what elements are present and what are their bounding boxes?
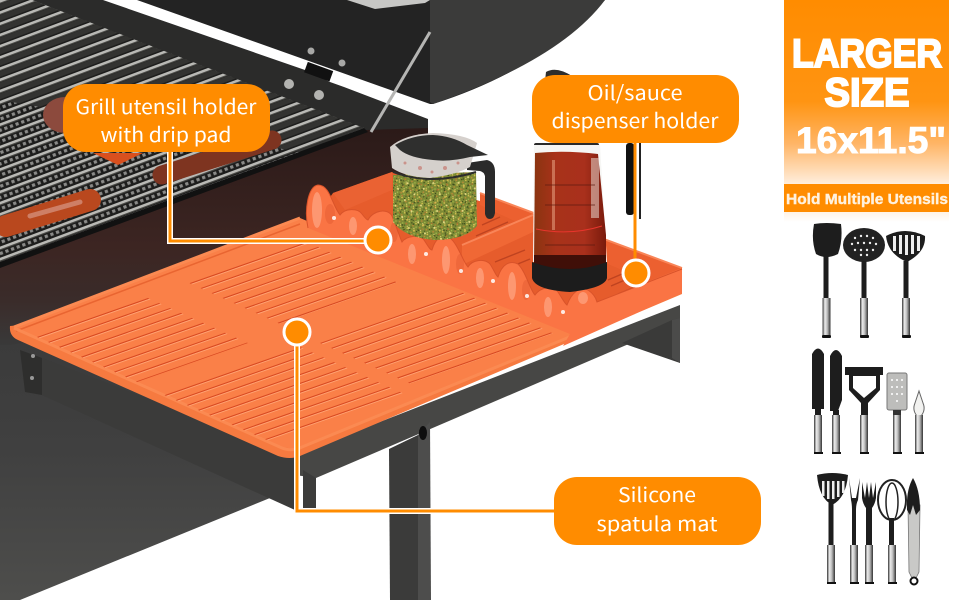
- panel: larger size: [784, 0, 949, 184]
- compartment floor ribs: [476, 217, 652, 300]
- banner: hold multiple utensils: Hold Multiple Utensils: [786, 191, 948, 208]
- callout label: silicone spatula mat: spatula mat: [596, 508, 718, 537]
- banner: hold multiple utensils: [784, 184, 949, 222]
- rod: [371, 32, 430, 132]
- lid: [137, 0, 605, 104]
- icon: slotted spoon: [843, 228, 885, 338]
- icon: potato masher: [845, 367, 883, 454]
- icon: narrow spatula: [830, 350, 842, 454]
- scalloped utensil ridge: [306, 185, 682, 346]
- heading: larger size: LARGER: [792, 32, 942, 76]
- callout label: oil sauce dispenser holder: [532, 75, 739, 143]
- callout label: oil sauce dispenser holder: dispenser holder: [552, 105, 719, 134]
- shelf side and legs: [20, 305, 680, 600]
- utensils row 1: [813, 223, 925, 338]
- utensils row 3: [817, 473, 920, 584]
- callout label: silicone spatula mat: [554, 477, 761, 545]
- dimensions text: 16x11.5": [796, 120, 946, 161]
- oil dispenser bottle: [532, 70, 641, 292]
- grill body and shelf scene: [0, 0, 680, 600]
- icon: spatula: [812, 348, 824, 454]
- callout label: grill utensil holder: Grill utensil holder: [76, 91, 257, 120]
- icon: whisk: [878, 480, 906, 584]
- icon: serving fork: [862, 482, 876, 584]
- grill grate: [0, 0, 370, 268]
- callout: dispenser holder leader: [623, 142, 649, 286]
- lower grill body: [0, 300, 300, 600]
- grill frame with bolts: [32, 0, 428, 130]
- callout label: silicone spatula mat: Silicone: [618, 479, 696, 508]
- icon: slotted turner: [886, 231, 925, 338]
- spice jar: [390, 133, 495, 240]
- divider: [462, 215, 533, 265]
- callout label: grill utensil holder: with drip pad: [100, 119, 232, 148]
- icon: slotted spatula: [817, 473, 848, 584]
- icon: carving fork: [849, 478, 860, 584]
- callout label: oil sauce dispenser holder: Oil/sauce: [588, 77, 682, 106]
- sausages on grate: [6, 97, 272, 226]
- drainage ribs: [92, 263, 481, 421]
- back wall left: [333, 172, 392, 210]
- mat top face: [14, 218, 575, 449]
- callout label: grill utensil holder: [63, 84, 270, 152]
- mat side: [10, 268, 682, 458]
- callout: silicone spatula mat leader: [284, 319, 556, 511]
- icon: bottle opener: [914, 391, 924, 454]
- mat back floor: [308, 172, 682, 332]
- utensils row 2: [812, 348, 924, 454]
- silicone mat: [10, 172, 682, 458]
- icon: solid turner: [813, 223, 842, 338]
- icon: tongs: [907, 478, 920, 584]
- back wall right: [480, 193, 682, 282]
- callout: grill utensil holder leader: [170, 150, 391, 253]
- panel: larger size: SIZE: [824, 71, 910, 115]
- icon: grater: [887, 373, 907, 454]
